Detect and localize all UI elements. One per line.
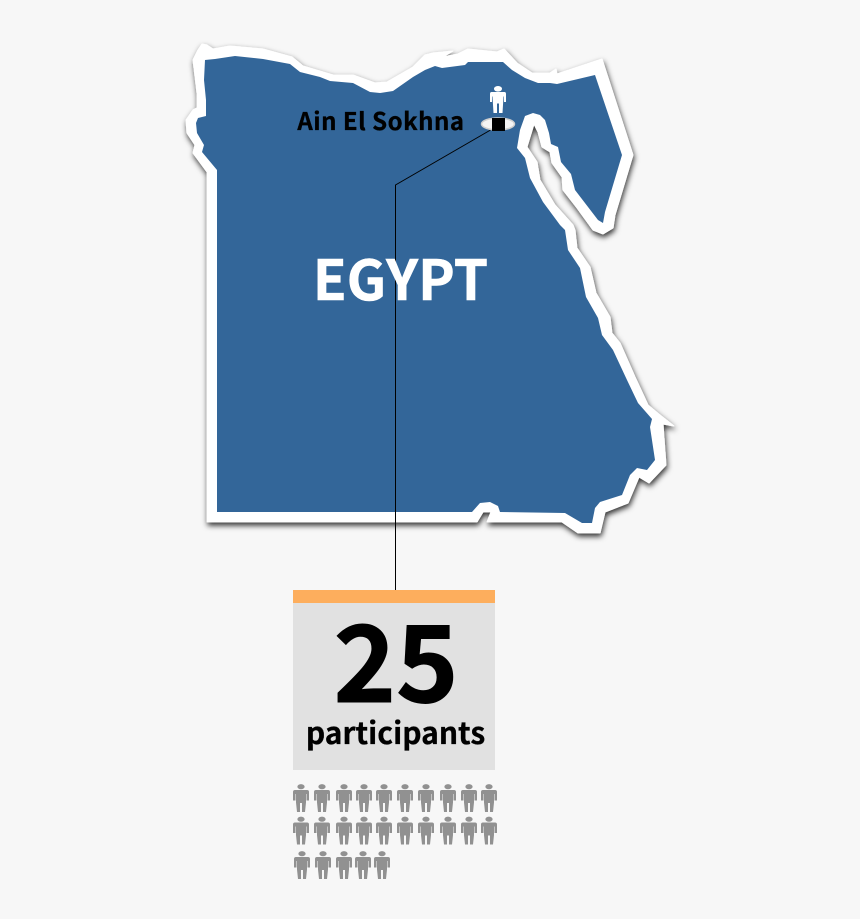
map outline xyxy=(186,44,674,533)
location label: Ain El Sokhna xyxy=(296,102,465,137)
participant count: 25 xyxy=(333,579,459,733)
map: Egypt xyxy=(186,44,674,533)
icon: person marker xyxy=(490,86,506,113)
participants card xyxy=(293,579,495,770)
people icons: 25 participants xyxy=(293,784,497,879)
card accent bar xyxy=(293,590,495,603)
country label: EGYPT xyxy=(313,236,488,316)
leader line xyxy=(396,128,494,590)
location marker xyxy=(482,86,514,131)
map fill xyxy=(196,56,655,523)
participants label: participants xyxy=(306,709,485,753)
